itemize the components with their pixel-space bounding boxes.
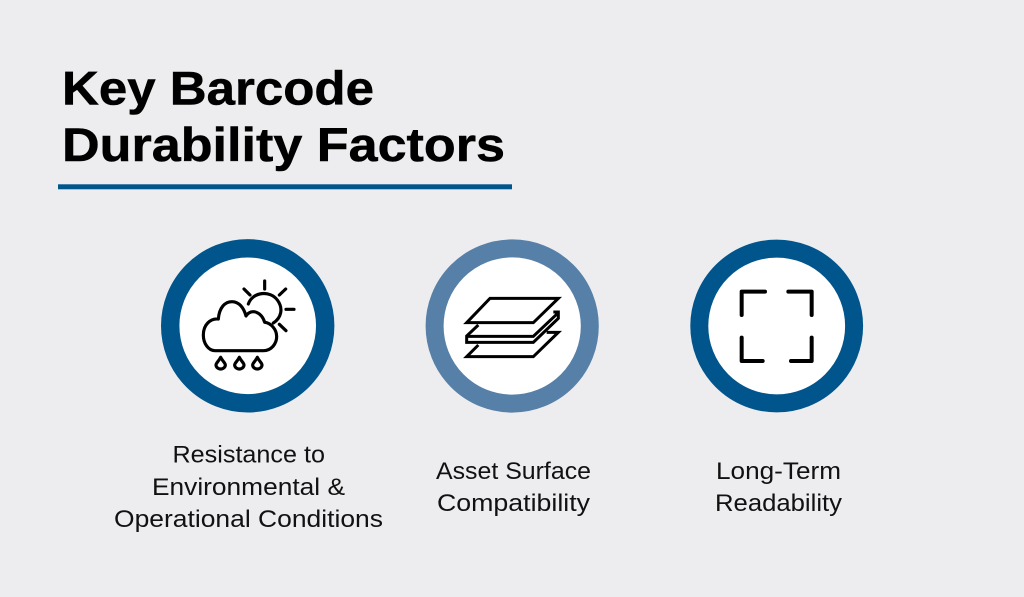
title underline <box>58 184 512 189</box>
label: environmental resistance: Operational Conditions <box>114 506 383 533</box>
icon ring: scan <box>699 249 854 403</box>
factor: surface compatibility <box>435 248 591 517</box>
label: long-term readability: Long-Term <box>716 458 841 485</box>
label: environmental resistance: Resistance to <box>172 442 325 468</box>
icon ring: layers <box>435 248 590 404</box>
icon: cloud, sun and rain <box>203 281 294 369</box>
label: long-term readability: Readability <box>715 490 843 517</box>
icon ring: weather <box>170 248 325 403</box>
label: surface compatibility: Asset Surface <box>436 458 591 485</box>
label: environmental resistance <box>114 442 383 533</box>
label: surface compatibility <box>436 458 591 517</box>
icon: scan frame <box>742 292 812 361</box>
title <box>62 62 505 171</box>
icon: stacked layers <box>467 298 558 357</box>
title: Durability Factors <box>62 118 505 171</box>
factor: long-term readability <box>699 249 854 517</box>
label: long-term readability <box>715 458 843 517</box>
label: surface compatibility: Compatibility <box>437 490 591 517</box>
factor: environmental resistance <box>114 248 383 533</box>
title: Key Barcode <box>62 62 374 114</box>
label: environmental resistance: Environmental & <box>152 474 345 501</box>
